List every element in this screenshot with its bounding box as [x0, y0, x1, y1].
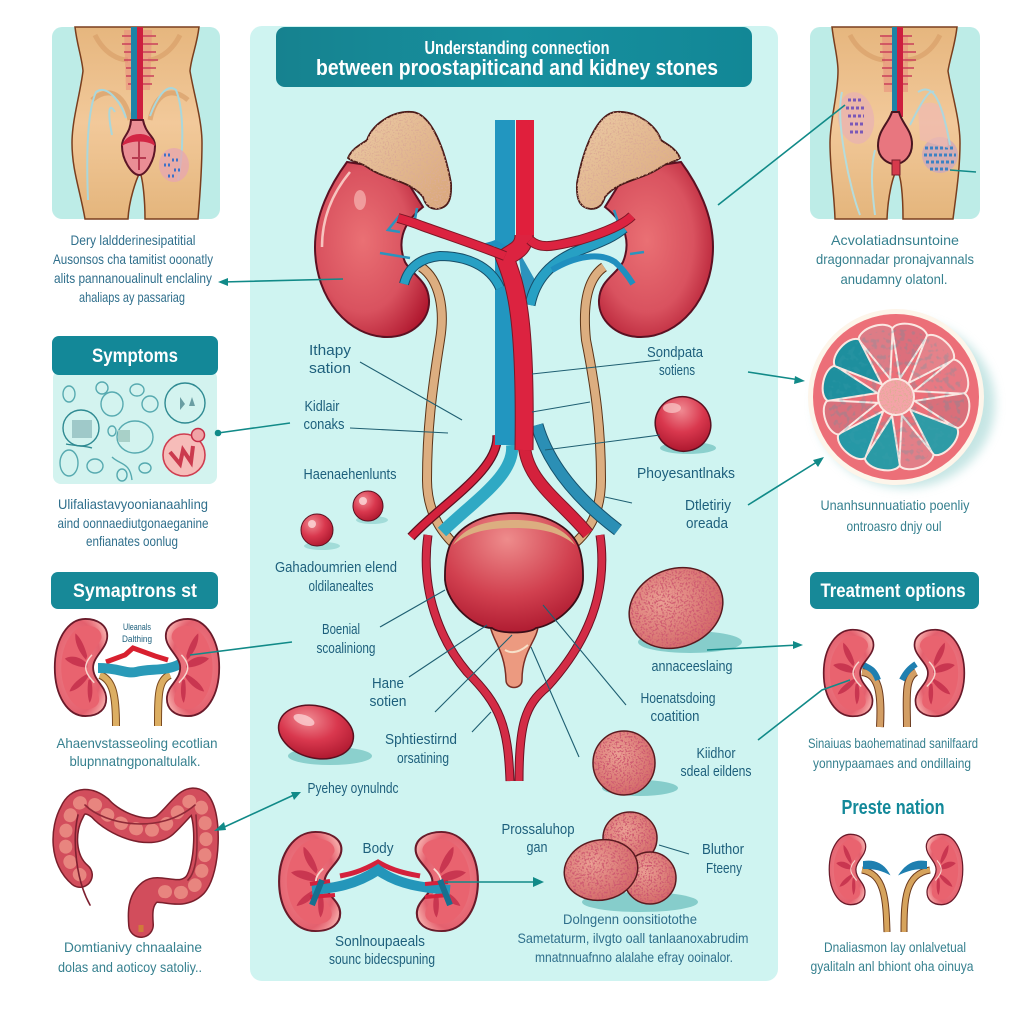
labels: right of central anatomy: sounc bidecspuning [329, 951, 435, 968]
text: left intro caption [53, 232, 213, 305]
labels: left of central anatomy: Pyehey oynulndc [308, 780, 399, 797]
heading: prevention: Preste nation [842, 797, 944, 819]
icon: kidneys pair left [55, 619, 219, 726]
icon: kidneys pair prevention [829, 834, 963, 932]
text: prostate caption [820, 497, 970, 534]
text: right intro caption: Acvolatiadnsuntoine [831, 232, 959, 248]
text: kidneys caption left [56, 735, 218, 769]
labels: right of central anatomy: Dtletiriy [685, 497, 731, 514]
illustration: prostate cross-section [808, 309, 995, 488]
text: prevention caption [810, 939, 974, 974]
text: left intro caption: Ausonsos cha tamitist ooonatly [53, 251, 213, 267]
iliac vessels [426, 535, 602, 781]
title banner: Understanding connection [424, 38, 610, 58]
icon: kidneys pair left: Dalthing [122, 634, 152, 644]
labels: left of central anatomy: Kidlair [304, 398, 340, 415]
labels: left of central anatomy: oldilanealtes [308, 578, 374, 595]
labels: left of central anatomy: Hane [372, 675, 404, 692]
text: prostate caption: Unanhsunnuatiatio poenliy [820, 497, 970, 513]
text: colon caption: dolas and aoticoy satoliy.. [58, 959, 202, 975]
labels: right of central anatomy: oreada [686, 515, 729, 532]
heading: treatment options [810, 572, 979, 609]
text: symptoms caption: aind oonnaediutgonaeganine [58, 515, 209, 531]
icon: kidneys pair left: Uleanals [123, 622, 151, 632]
labels: right of central anatomy: sotiens [659, 362, 695, 379]
text: right intro caption: dragonnadar pronajvannals [816, 251, 974, 267]
labels: left of central anatomy: scoaliniong [316, 640, 376, 657]
labels: right of central anatomy: coatition [650, 708, 700, 725]
illustration: central urinary system [315, 112, 713, 781]
text: prevention caption: Dnaliasmon lay onlalvetual [824, 939, 966, 955]
icon: colon [65, 800, 206, 932]
stone cluster [559, 812, 698, 912]
left adrenal gland [348, 112, 451, 209]
labels: right of central anatomy: Sonlnoupaeals [335, 933, 425, 950]
labels: left of central anatomy: Boenial [322, 621, 360, 638]
text: kidneys caption left: blupnnatngponaltulalk. [70, 753, 200, 769]
text: bottom caption in panel [518, 911, 748, 965]
text: left intro caption: alits pannanoualinult enclaliny [54, 270, 212, 286]
text: symptoms caption [58, 496, 209, 549]
bladder [445, 513, 583, 688]
central blue vein [380, 120, 644, 445]
stone: red bean upper right [645, 387, 721, 461]
heading: treatment options: Treatment options [820, 581, 966, 602]
labels: right of central anatomy [329, 344, 752, 968]
labels: left of central anatomy [275, 342, 457, 797]
text: colon caption: Domtianivy chnaalaine [64, 939, 202, 955]
labels: left of central anatomy: Sphtiestirnd [385, 731, 457, 748]
labels: left of central anatomy: sotien [370, 693, 406, 710]
text: left intro caption: ahaliaps ay passariag [79, 289, 185, 305]
text: kidneys caption left: Ahaenvstasseoling ecotlian [56, 735, 218, 751]
panel: central background [250, 26, 778, 981]
stone: round speckled [593, 731, 678, 796]
heading: symptoms second: Symaptrons st [73, 581, 198, 602]
label lines: central anatomy [350, 360, 689, 854]
labels: right of central anatomy: Body [362, 840, 394, 857]
labels: left of central anatomy: Ithapy [309, 342, 352, 359]
stone: small red circles [301, 491, 388, 550]
title banner: between proostapiticand and kidney stones [316, 55, 718, 80]
labels: right of central anatomy: Bluthor [702, 841, 744, 858]
icon: kidneys pair body [279, 832, 478, 931]
labels: right of central anatomy: Prossaluhop [502, 821, 574, 838]
labels: right of central anatomy: sdeal eildens [680, 763, 752, 780]
text: treatment caption: Sinaiuas baohematinad sanilfaard [808, 735, 978, 751]
panel: left body illustration [52, 27, 220, 219]
text: treatment caption: yonnypaamaes and ondillaing [813, 755, 971, 771]
text: prevention caption: gyalitaln anl bhiont oha oinuya [810, 958, 974, 974]
labels: right of central anatomy: Sondpata [647, 344, 704, 361]
labels: right of central anatomy: Kiidhor [696, 745, 736, 762]
labels: right of central anatomy: annaceeslaing [652, 658, 732, 675]
labels: right of central anatomy: Fteeny [706, 860, 742, 877]
text: prostate caption: ontroasro dnjy oul [846, 518, 942, 534]
labels: left of central anatomy: conaks [304, 416, 344, 433]
text: bottom caption in panel: Dolngenn oonsitiotothe [563, 911, 697, 927]
text: bottom caption in panel: Sametaturm, ilvgto oall tanlaanoxabrudim [518, 930, 748, 946]
stone: red bean lower left [273, 698, 372, 766]
text: right intro caption: anudamny olatonl. [840, 271, 948, 287]
stone: large speckled [617, 554, 742, 662]
panel: right body illustration [810, 27, 980, 219]
labels: left of central anatomy: Haenaehenlunts [304, 466, 396, 483]
text: right intro caption [816, 232, 974, 287]
text: symptoms caption: enfianates oonlug [86, 533, 178, 549]
arrows: teal connectors [190, 105, 976, 887]
heading: symptoms second [51, 572, 218, 609]
text: bottom caption in panel: mnatnnuafnno alalahe efray ooinalor. [535, 949, 733, 965]
title banner [276, 27, 752, 87]
ureters [421, 267, 604, 543]
right kidney [599, 162, 713, 337]
text: treatment caption [808, 735, 978, 771]
text: left intro caption: Dery laldderinesipatitial [70, 232, 196, 248]
panel: symptoms doodles: Symptoms [92, 346, 178, 367]
lower vessels [411, 425, 618, 537]
labels: left of central anatomy: orsatining [397, 750, 449, 767]
labels: left of central anatomy: sation [309, 360, 351, 377]
labels: right of central anatomy: Hoenatsdoing [640, 690, 716, 707]
left kidney [315, 162, 429, 337]
panel: symptoms doodles [52, 336, 218, 484]
labels: right of central anatomy: gan [526, 839, 548, 856]
text: symptoms caption: Ulifaliastavyoonianaahling [58, 496, 208, 512]
right adrenal gland [577, 112, 680, 209]
text: colon caption [58, 939, 202, 975]
central red artery [398, 120, 632, 450]
labels: right of central anatomy: Phoyesantlnaks [637, 465, 735, 482]
labels: left of central anatomy: Gahadoumrien elend [275, 559, 397, 576]
icon: kidneys pair treatment [824, 630, 964, 727]
